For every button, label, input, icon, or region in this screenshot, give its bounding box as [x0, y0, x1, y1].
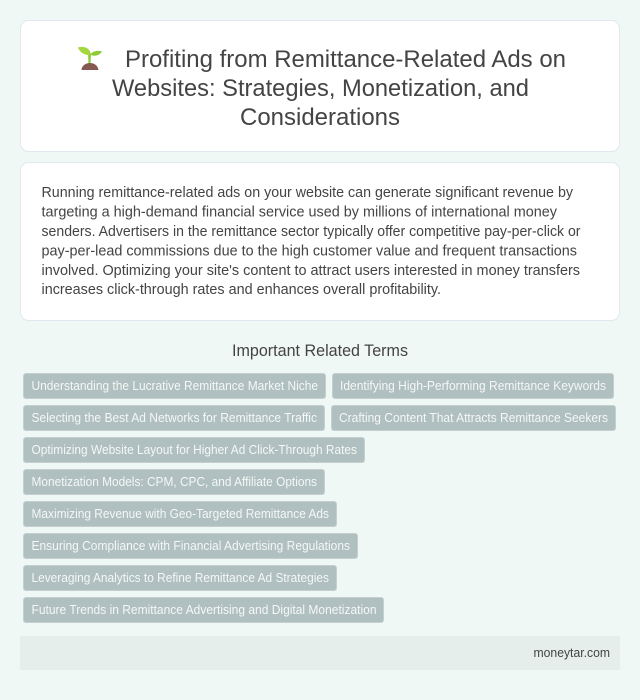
intro paragraph [42, 185, 581, 298]
panel: title card [20, 20, 620, 152]
tag: ad networks: Selecting the Best Ad Networks for Remittance Traffic [32, 410, 318, 425]
icon: seedling [78, 47, 102, 70]
tag: remittance keywords: Identifying High-Performing Remittance Keywords [340, 378, 606, 393]
tag: crafting content: Crafting Content That Attracts Remittance Seekers [339, 410, 608, 425]
intro paragraph: senders. Advertisers in the remittance sector typically offer competitive pay-per-click or [42, 224, 581, 240]
tag: remittance market niche [24, 374, 326, 398]
tag: geo-targeted ads [24, 502, 336, 526]
tag: website layout [24, 438, 364, 462]
heading: important related terms: Important Related Terms [232, 342, 408, 360]
panel: intro text card [20, 162, 620, 320]
intro paragraph: targeting a high-demand financial service used by millions of international money [42, 204, 558, 220]
tag: analytics: Leveraging Analytics to Refine Remittance Ad Strategies [32, 570, 329, 585]
title: Profiting from Remittance-Related Ads on [125, 46, 566, 73]
tag: remittance keywords [332, 374, 614, 398]
tag: compliance [24, 534, 358, 558]
title [112, 46, 566, 131]
tag: compliance: Ensuring Compliance with Financial Advertising Regulations [32, 538, 350, 553]
tag: remittance market niche: Understanding the Lucrative Remittance Market Niche [32, 378, 318, 393]
tag list [24, 374, 616, 622]
intro paragraph: involved. Optimizing your site's content to attract users interested in money transfers [42, 263, 580, 279]
footer [20, 636, 620, 670]
intro paragraph: increases click-through rates and enhances overall profitability. [42, 282, 441, 298]
tag: crafting content [332, 406, 616, 430]
footer: moneytar.com [534, 646, 610, 660]
title: Websites: Strategies, Monetization, and [112, 75, 529, 102]
tag: ad networks [24, 406, 324, 430]
tag: monetization models [24, 470, 324, 494]
intro paragraph: Running remittance-related ads on your website can generate significant revenue by [42, 185, 574, 201]
tag: website layout: Optimizing Website Layout for Higher Ad Click-Through Rates [32, 442, 357, 457]
intro paragraph: pay-per-lead commissions due to the high customer value and frequent transactions [42, 244, 577, 260]
title: Considerations [240, 104, 400, 131]
tag: analytics [24, 566, 336, 590]
tag: future trends: Future Trends in Remittance Advertising and Digital Monetization [32, 602, 376, 617]
tag: monetization models: Monetization Models: CPM, CPC, and Affiliate Options [32, 474, 317, 489]
tag: geo-targeted ads: Maximizing Revenue with Geo-Targeted Remittance Ads [32, 506, 329, 521]
tag: future trends [24, 598, 384, 622]
